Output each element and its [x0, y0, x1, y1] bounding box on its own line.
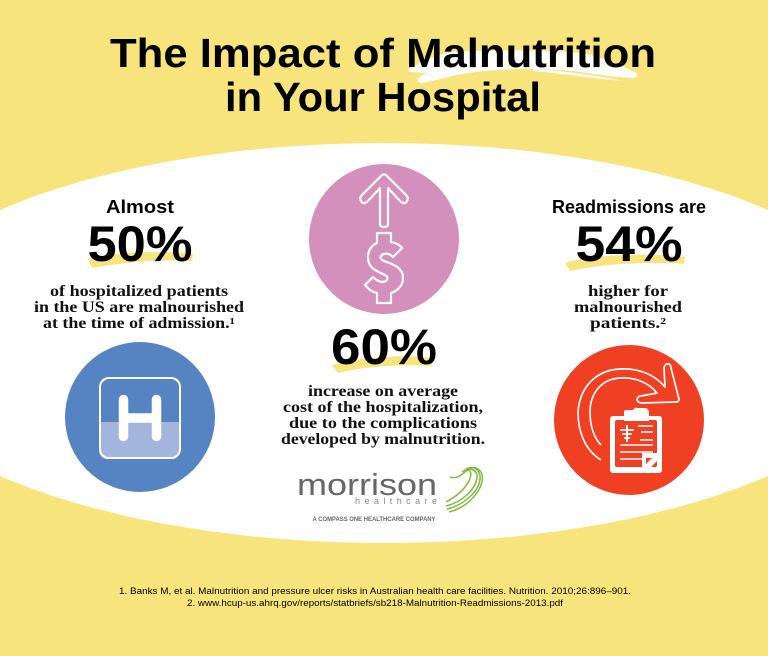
stat: 54% readmissions: 54%	[576, 216, 682, 272]
stat: 54% readmissions: malnourished	[574, 299, 682, 316]
stat: 50% hospitalized: at the time of admission.¹	[43, 315, 235, 332]
title	[110, 30, 656, 120]
logo: morrison healthcare: A COMPASS ONE HEALTHCARE COMPANY	[312, 517, 436, 523]
icon: hospital sign	[65, 342, 215, 492]
stat: 50% hospitalized: 50%	[88, 216, 192, 272]
brush stroke behind Malnutrition	[408, 50, 637, 83]
icon: clipboard with return arrow	[554, 345, 704, 495]
stat: 54% readmissions: higher for	[588, 283, 668, 300]
stat: 60% cost	[281, 319, 485, 448]
stat: 50% hospitalized: of hospitalized patients	[50, 283, 228, 300]
stat: 60% cost: cost of the hospitalization,	[283, 399, 483, 416]
stat: 54% readmissions	[552, 197, 706, 332]
stat: 60% cost: due to the complications	[289, 415, 477, 432]
stat: 50% hospitalized	[34, 197, 244, 332]
footnotes	[119, 586, 631, 608]
stat: 50% hospitalized: Almost	[106, 197, 174, 217]
footnotes: 1. Banks M, et al. Malnutrition and pressure ulcer risks in Australian health care facilities. Nutrition. 2010;26:896–901.	[119, 586, 631, 596]
title: The Impact of Malnutrition	[110, 30, 656, 76]
stat: 60% cost: increase on average	[308, 383, 458, 400]
stat: 54% readmissions: Readmissions are	[552, 197, 706, 217]
footnotes: 2. www.hcup-us.ahrq.gov/reports/statbriefs/sb218-Malnutrition-Readmissions-2013.pdf	[187, 598, 564, 608]
title: in Your Hospital	[225, 74, 541, 120]
stat: 50% hospitalized: in the US are malnourished	[34, 299, 244, 316]
stat: 54% readmissions: patients.²	[590, 315, 666, 332]
stat: 60% cost: 60%	[331, 319, 437, 375]
highlight stroke	[88, 252, 193, 268]
icon: arrow up and dollar	[309, 164, 459, 314]
logo: morrison healthcare	[297, 467, 482, 523]
logo: morrison healthcare: healthcare	[355, 496, 437, 506]
logo: morrison healthcare: morrison	[297, 467, 437, 502]
stat: 60% cost: developed by malnutrition.	[281, 431, 485, 448]
